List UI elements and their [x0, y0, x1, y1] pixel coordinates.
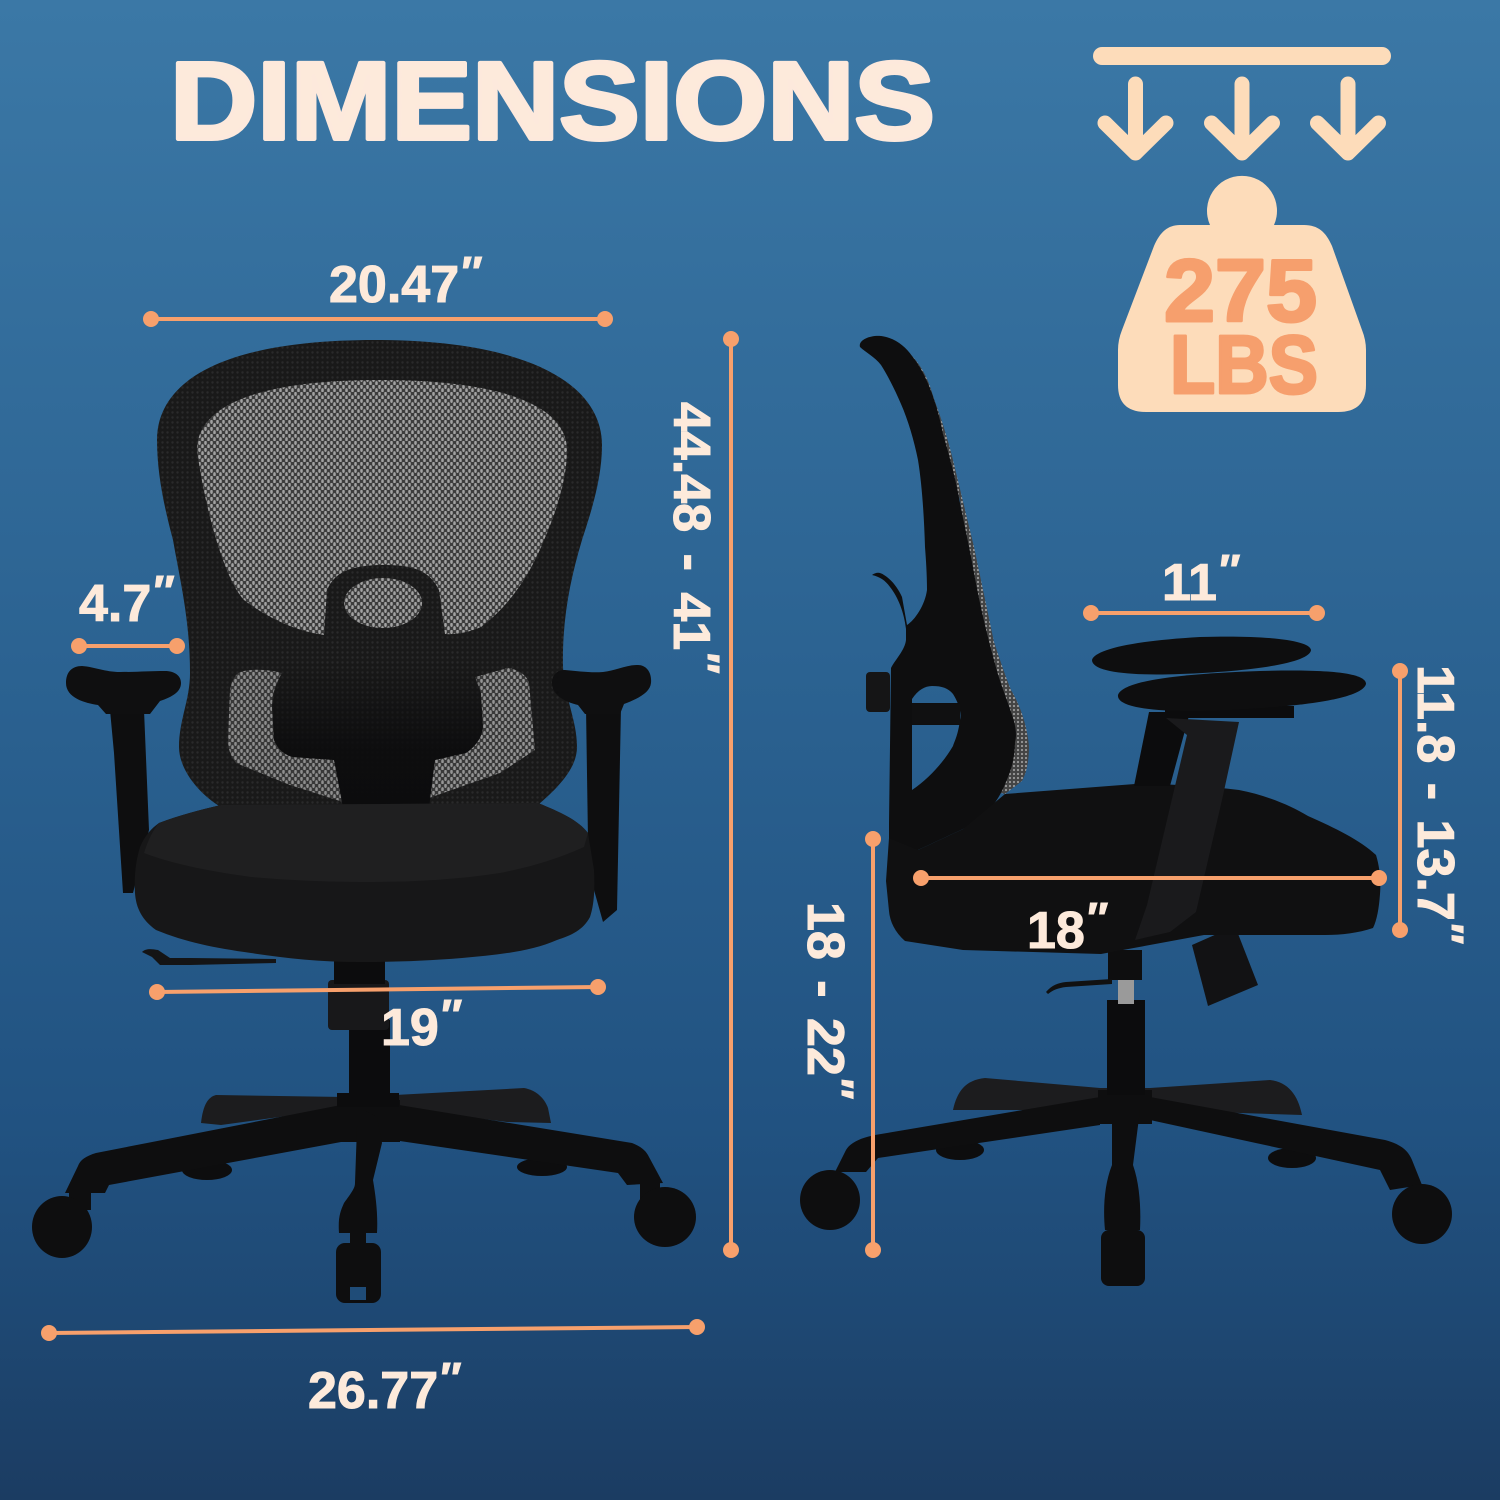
label: ″: [813, 1076, 862, 1099]
end dot: [723, 331, 739, 347]
dimension: base width: [41, 1319, 705, 1420]
dimension: armrest height: [1392, 663, 1472, 944]
base legs: [835, 1090, 1422, 1230]
lumbar hole: [344, 578, 422, 628]
lumbar shadow: [272, 660, 483, 808]
line: [49, 1327, 697, 1333]
mesh edge: [881, 336, 1029, 794]
armrest plate: [1165, 706, 1294, 718]
label: 19: [381, 999, 439, 1057]
casters: [32, 1182, 696, 1303]
arm post: [1135, 718, 1239, 940]
backrest mesh upper: [197, 380, 567, 635]
end dot: [71, 638, 87, 654]
dimension: total height: [662, 331, 739, 1258]
end dot: [1392, 663, 1408, 679]
label: 44.48 - 41: [662, 402, 720, 650]
label: ″: [459, 248, 482, 297]
label: ″: [679, 650, 728, 673]
end dot: [597, 311, 613, 327]
icon: down arrows: [1105, 84, 1378, 153]
end dot: [1309, 605, 1325, 621]
end dot: [723, 1242, 739, 1258]
backrest frame: [860, 336, 1016, 880]
end dot: [865, 1242, 881, 1258]
end dot: [865, 831, 881, 847]
label: ″: [438, 1354, 461, 1403]
dimension: back width: [143, 248, 613, 327]
end dot: [169, 638, 185, 654]
lumbar mesh right: [429, 668, 535, 798]
arm rear strut: [1134, 712, 1190, 786]
weight value: 275: [1164, 241, 1317, 340]
end dot: [1083, 605, 1099, 621]
icon: load bar: [1093, 47, 1391, 65]
line: [921, 876, 1379, 880]
label: 18: [1027, 902, 1085, 960]
tilt knob: [1192, 926, 1258, 1006]
rear base legs: [953, 1078, 1302, 1115]
chair: side view: [800, 336, 1452, 1286]
dimension: seat width: [149, 979, 606, 1057]
tilt lever: [1046, 979, 1112, 994]
line: [871, 839, 875, 1250]
label: 11.8 - 13.7: [1406, 665, 1464, 921]
seat: [135, 803, 594, 962]
label: ″: [1217, 546, 1240, 595]
headrest knob: [866, 672, 890, 712]
seat top: [144, 803, 588, 882]
label: 4.7: [79, 575, 151, 633]
line: [1091, 611, 1317, 615]
icon: weight capacity: [1093, 47, 1391, 412]
caster gap: [350, 1287, 366, 1300]
line: [1398, 671, 1402, 930]
label: 11: [1162, 554, 1217, 612]
line: [151, 317, 605, 321]
armrest lower: [1118, 671, 1366, 711]
label: ″: [1085, 894, 1108, 943]
end dot: [41, 1325, 57, 1341]
label: 18 - 22: [796, 902, 854, 1076]
gas cylinder: [328, 960, 399, 1107]
rear base legs: [201, 1088, 551, 1125]
end dot: [1392, 922, 1408, 938]
dimension: armrest width: [71, 567, 185, 654]
line: [157, 987, 598, 992]
line: [79, 644, 177, 648]
piston collar: [1108, 950, 1142, 980]
backrest frame: [157, 340, 602, 807]
label: ″: [439, 991, 462, 1040]
casters: [800, 1170, 1452, 1286]
end dot: [913, 870, 929, 886]
dimension: seat height: [796, 831, 881, 1258]
end dot: [590, 979, 606, 995]
chair: front view: [32, 340, 696, 1303]
armrest posts: [110, 707, 621, 922]
icon: weight body: [1118, 176, 1366, 412]
end dot: [1371, 870, 1387, 886]
label: ″: [1423, 921, 1472, 944]
line: [729, 339, 733, 1250]
frame crossbar front: [912, 704, 960, 724]
lumbar mesh left: [228, 670, 343, 802]
crossbar: [900, 703, 960, 725]
armrest pads: [66, 665, 651, 714]
dimension: seat depth: [913, 870, 1387, 960]
rear casters: [936, 1140, 1316, 1168]
title: DIMENSIONS: [170, 40, 935, 163]
dimension: armrest length: [1083, 546, 1325, 621]
base legs: [65, 1100, 663, 1233]
weight unit: LBS: [1170, 318, 1318, 411]
end dot: [149, 984, 165, 1000]
chrome piston: [1118, 978, 1134, 1004]
label: 20.47: [329, 256, 459, 314]
armrest upper: [1092, 637, 1311, 674]
end dot: [143, 311, 159, 327]
rear casters: [182, 1158, 567, 1180]
seat: [886, 784, 1380, 954]
label: 26.77: [308, 1362, 438, 1420]
gas cylinder: [1107, 1000, 1145, 1095]
label: ″: [151, 567, 174, 616]
seat lever: [142, 949, 276, 965]
end dot: [689, 1319, 705, 1335]
